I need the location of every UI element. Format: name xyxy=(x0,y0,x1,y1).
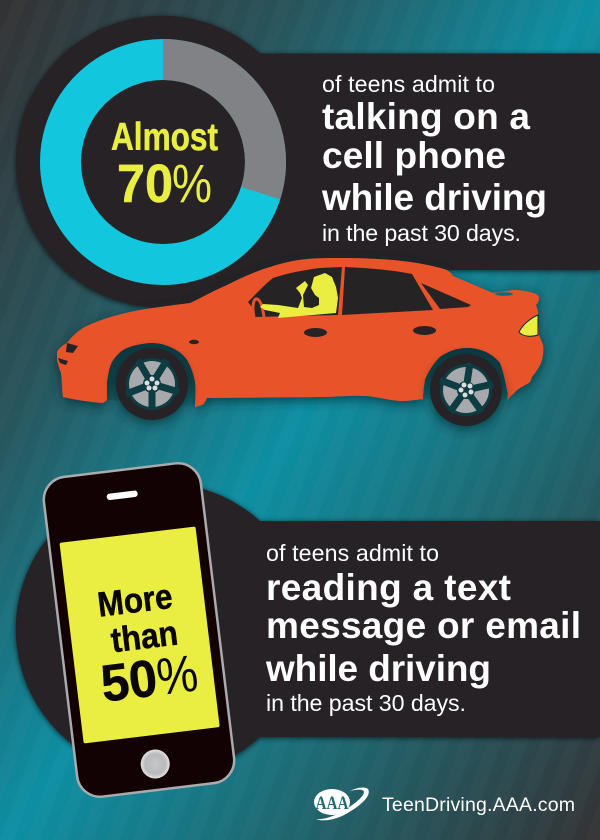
front wheel xyxy=(116,348,188,420)
donut label xyxy=(111,116,218,214)
panel backing: circle and banner xyxy=(16,483,600,775)
phone screen label: 50 xyxy=(98,649,160,714)
phone screen label: % xyxy=(153,644,201,707)
door handle front xyxy=(304,328,327,337)
side mirror mark xyxy=(189,340,199,344)
statement text: of teens admit to xyxy=(266,540,439,566)
phone body xyxy=(41,461,237,799)
car illustration xyxy=(57,258,543,426)
rear wheel xyxy=(430,354,502,426)
phone home button xyxy=(139,748,171,780)
rear door window xyxy=(342,267,433,315)
car body xyxy=(57,258,543,407)
panel backing: circle and banner xyxy=(16,16,600,308)
front window xyxy=(248,267,342,317)
icon: smartphone xyxy=(41,461,237,799)
statement text: cell phone xyxy=(322,135,506,176)
phone speaker xyxy=(106,490,138,500)
icon: AAA logo xyxy=(314,788,369,820)
headlights xyxy=(58,343,78,365)
statement text: reading a text xyxy=(266,567,511,608)
door handle rear xyxy=(413,326,436,335)
driver silhouette on phone xyxy=(260,273,338,318)
donut chart: almost 70 percent xyxy=(60,39,286,264)
panel: reading a text or email xyxy=(16,461,600,799)
tail light xyxy=(519,315,538,336)
statement text: talking on a xyxy=(322,96,530,137)
statement text xyxy=(265,540,581,716)
donut label: Almost xyxy=(111,116,218,159)
steering wheel xyxy=(253,299,264,317)
donut label: 70 xyxy=(117,154,173,214)
statement text: while driving xyxy=(321,177,547,218)
footer logo and URL xyxy=(314,788,575,820)
phone screen label: More xyxy=(95,577,175,625)
quarter window xyxy=(421,283,471,309)
statement text: while driving xyxy=(265,648,491,689)
statement text: of teens admit to xyxy=(322,71,495,97)
front wheel arch xyxy=(107,343,195,407)
phone screen xyxy=(59,526,220,743)
icon: AAA logo: AAA xyxy=(316,793,349,814)
rear wheel arch xyxy=(423,348,508,400)
statement text: in the past 30 days. xyxy=(266,690,466,716)
phone screen label xyxy=(89,575,201,714)
statement text: message or email xyxy=(266,605,581,646)
statement text: in the past 30 days. xyxy=(322,220,521,246)
statement text xyxy=(321,71,547,246)
panel: talking on a cell phone xyxy=(16,16,600,308)
website URL: TeenDriving.AAA.com xyxy=(382,794,575,816)
spoiler mark xyxy=(495,292,513,296)
donut label: % xyxy=(172,154,212,214)
phone screen label: than xyxy=(109,614,180,660)
